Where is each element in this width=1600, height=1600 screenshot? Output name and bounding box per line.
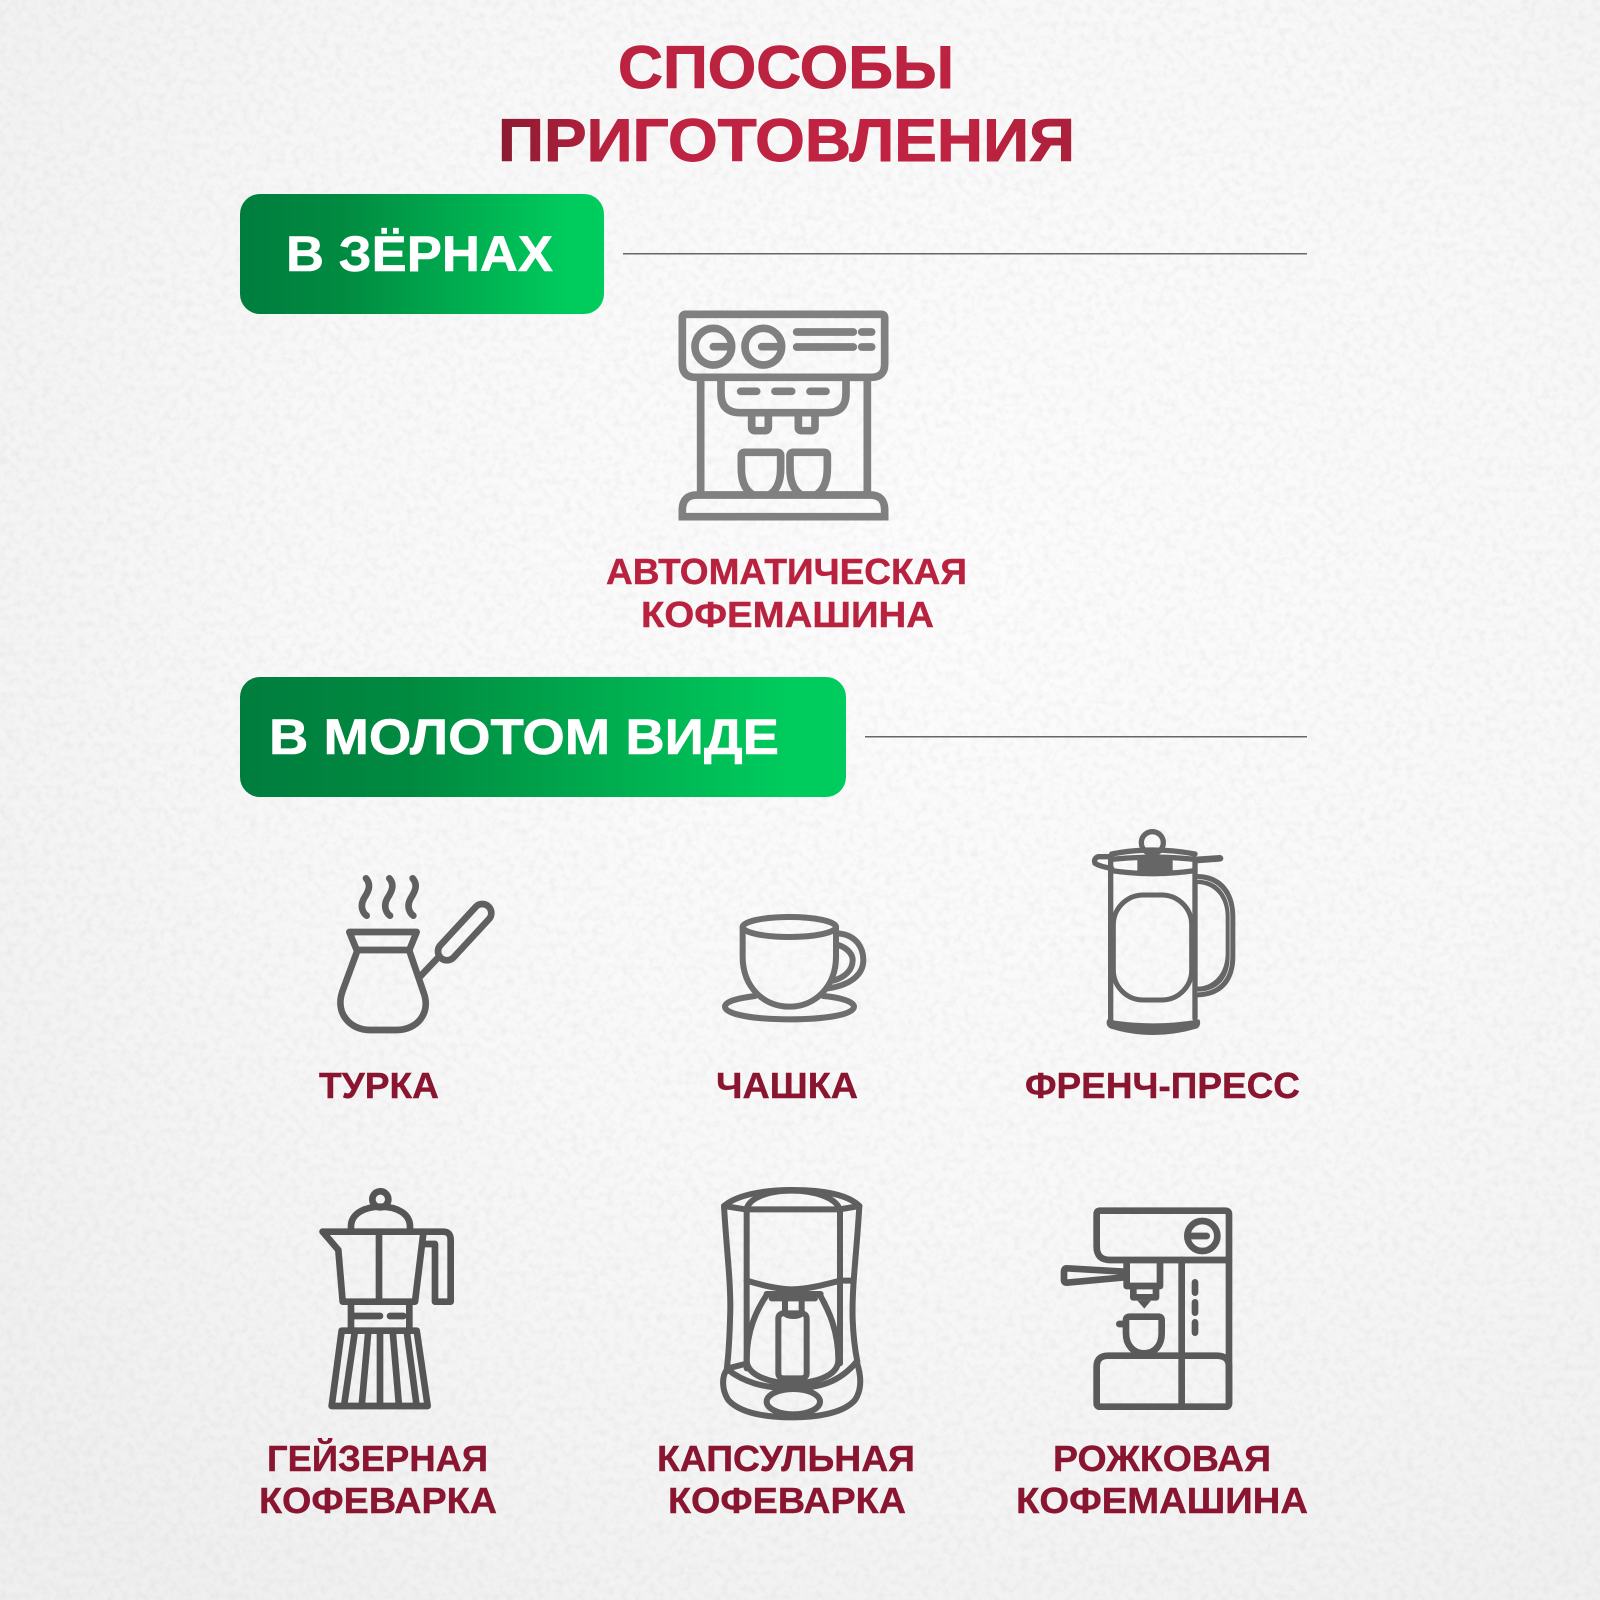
label: cup: ЧАШКА	[716, 1065, 858, 1106]
label: capsule coffee maker	[657, 1438, 915, 1521]
label: automatic coffee machine: КОФЕМАШИНА	[641, 594, 934, 635]
label: capsule coffee maker: КАПСУЛЬНАЯ	[657, 1438, 915, 1479]
label: automatic coffee machine: АВТОМАТИЧЕСКАЯ	[606, 551, 967, 592]
label: moka pot: КОФЕВАРКА	[259, 1480, 497, 1521]
heading badge: В МОЛОТОМ ВИДЕ: В МОЛОТОМ ВИДЕ	[269, 709, 779, 765]
label: espresso machine: КОФЕМАШИНА	[1016, 1480, 1308, 1521]
heading badge: В ЗЁРНАХ	[240, 194, 604, 314]
label: french press: ФРЕНЧ-ПРЕСС	[1025, 1065, 1300, 1106]
heading badge: В ЗЁРНАХ: В ЗЁРНАХ	[286, 226, 553, 282]
label: capsule coffee maker: КОФЕВАРКА	[668, 1480, 906, 1521]
heading badge: В МОЛОТОМ ВИДЕ	[240, 677, 846, 797]
icon: capsule coffee maker	[723, 1190, 860, 1417]
section: whole beans	[240, 194, 1307, 635]
label: turka: ТУРКА	[319, 1065, 439, 1106]
label: moka pot	[259, 1437, 497, 1521]
section: ground coffee	[240, 677, 1308, 1521]
icon: french press	[1095, 832, 1235, 1035]
icon: cup	[725, 917, 863, 1019]
title: СПОСОБЫ	[618, 34, 954, 101]
title	[498, 34, 1075, 174]
label: espresso machine: РОЖКОВАЯ	[1053, 1438, 1271, 1479]
icon: automatic coffee machine	[682, 314, 885, 517]
title: ПРИГОТОВЛЕНИЯ	[498, 107, 1075, 174]
label: espresso machine	[1016, 1438, 1308, 1521]
label: automatic coffee machine	[606, 551, 967, 635]
icon: moka pot	[323, 1191, 451, 1406]
icon: espresso machine	[1064, 1211, 1229, 1407]
label: moka pot: ГЕЙЗЕРНАЯ	[267, 1437, 488, 1479]
icon: turka	[340, 878, 491, 1030]
